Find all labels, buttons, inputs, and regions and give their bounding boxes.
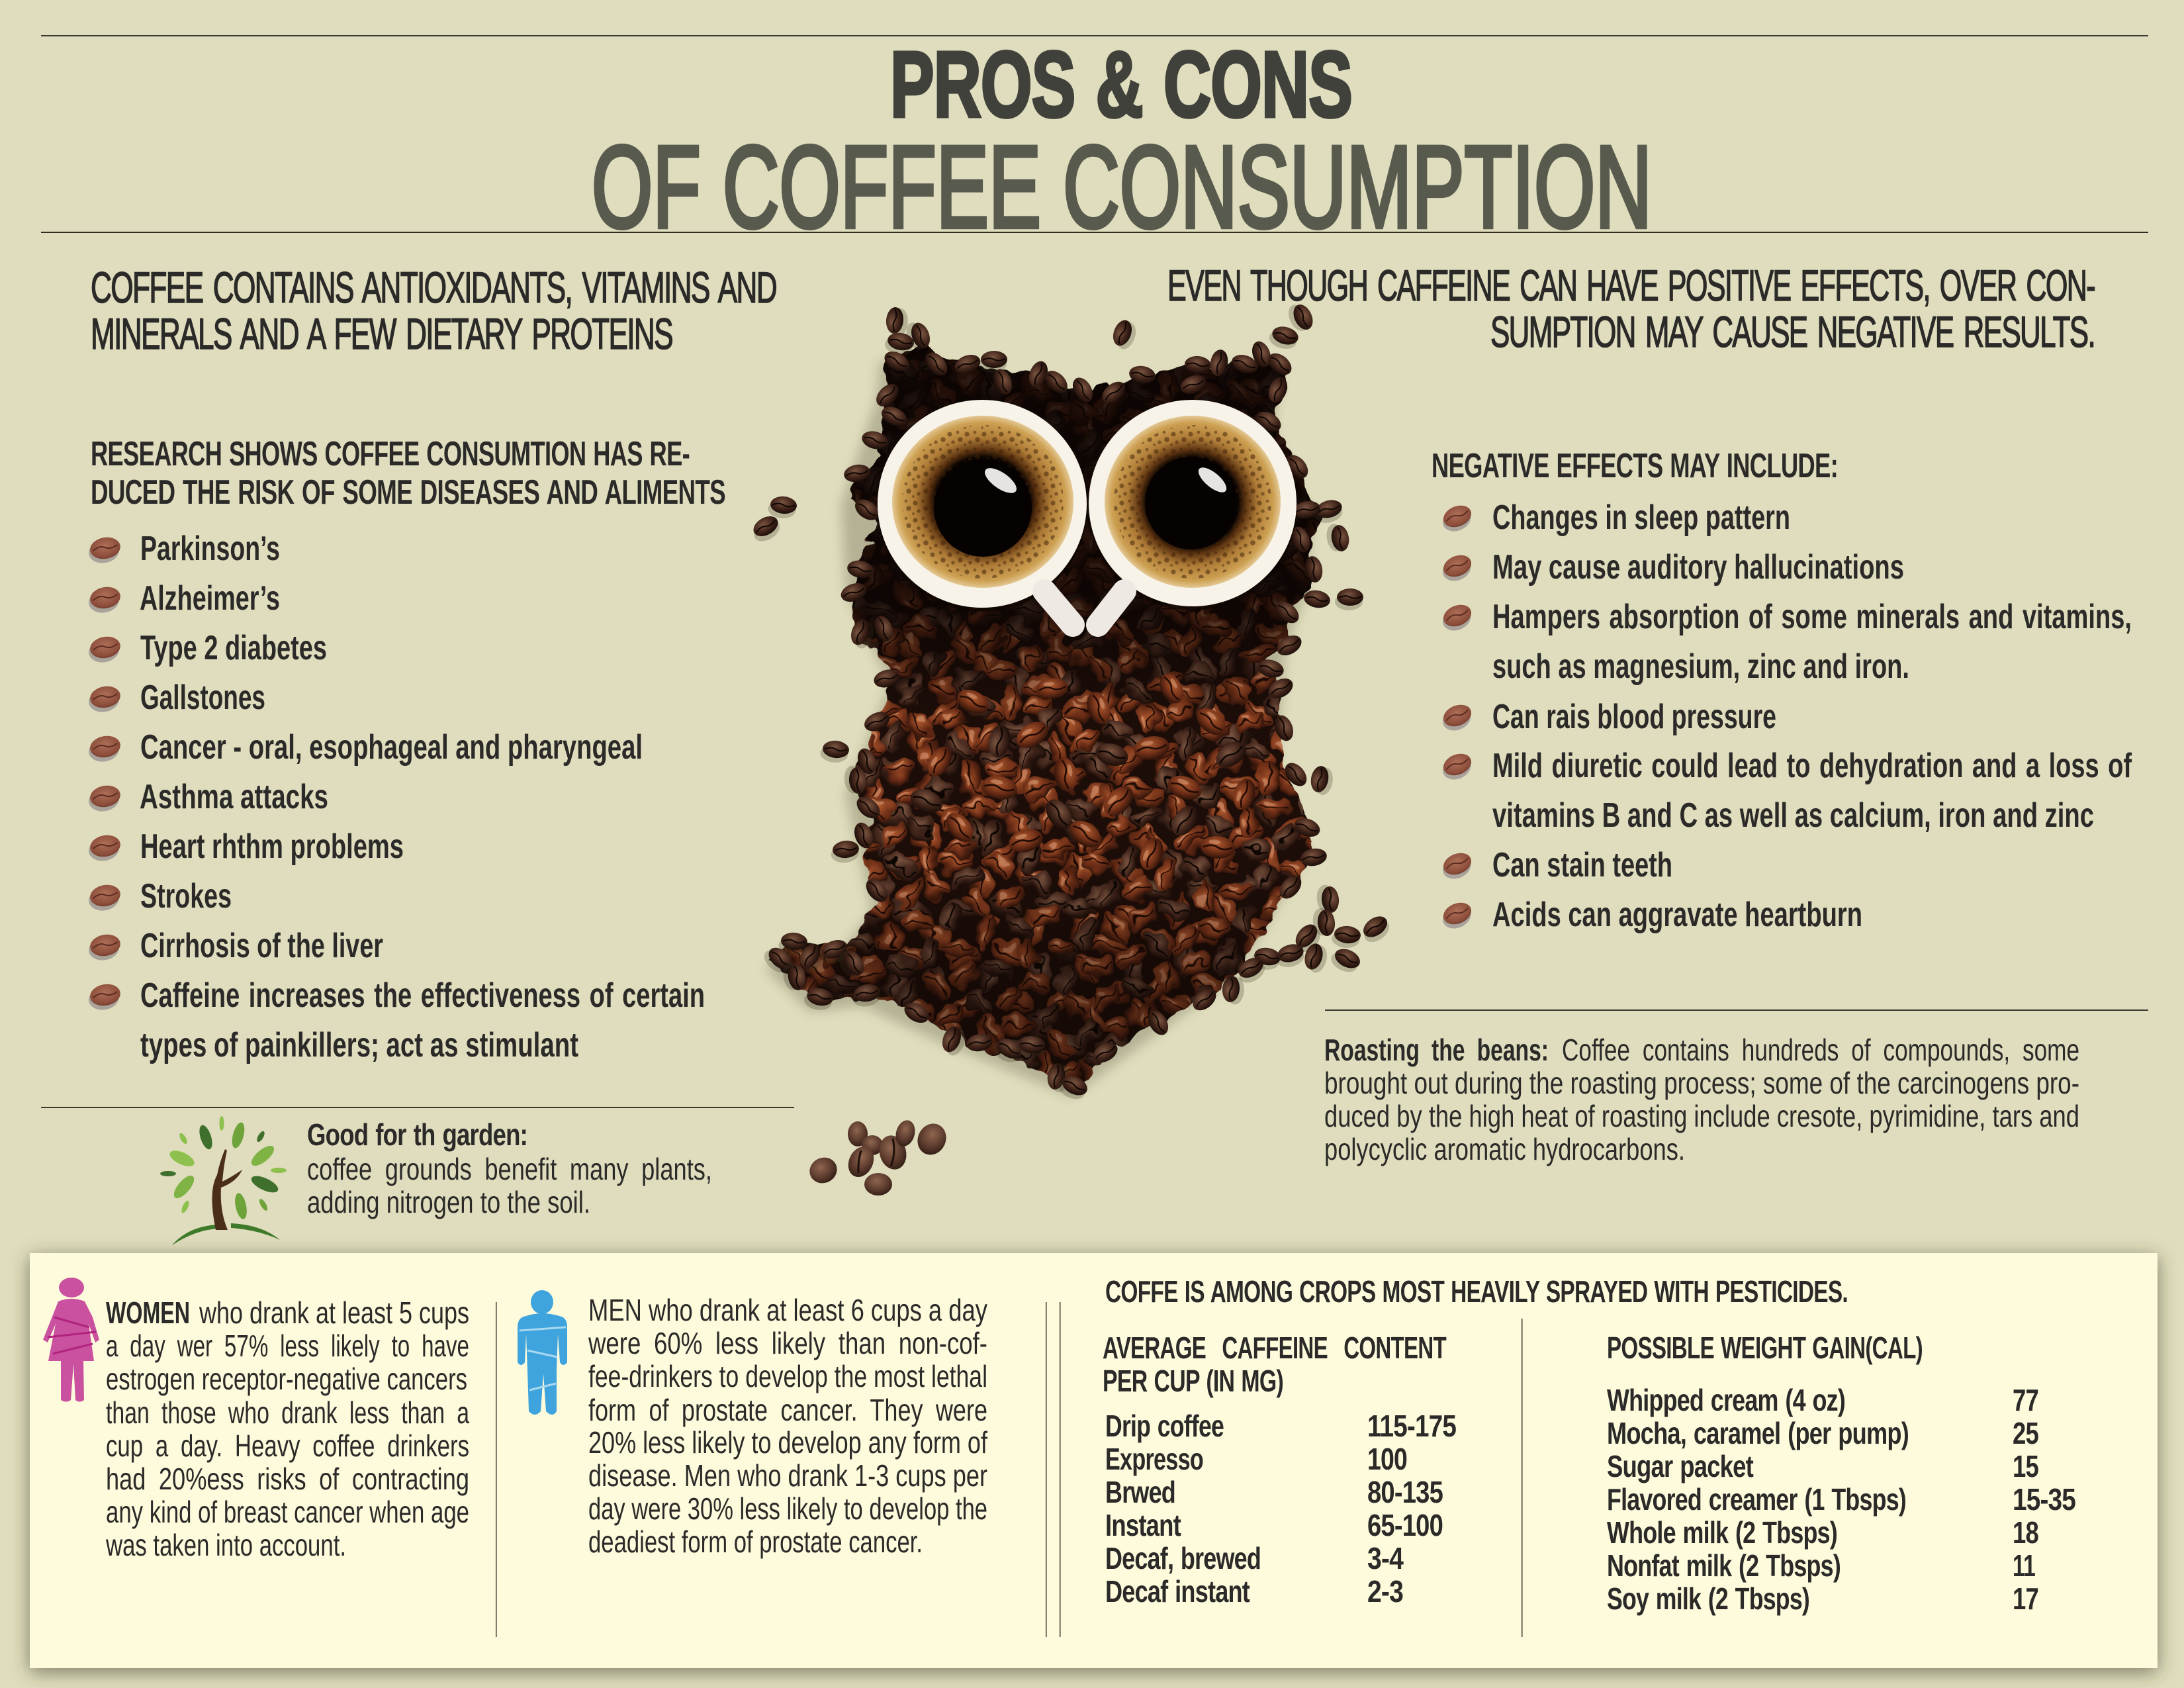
row: whole milk: Whole milk (2 Tbsps) [1607,1515,1837,1550]
row: sugar [1607,1449,2038,1483]
list item: Strokes [87,877,232,915]
list item: Type 2 diabetes: Type 2 diabetes [140,629,327,667]
row: whipped cream: Whipped cream (4 oz) [1607,1383,1845,1417]
row: flavored creamer: 15-35 [2013,1482,2075,1517]
list: diseases reduced [87,530,705,1064]
roasting the beans text: polycyclic aromatic hydrocarbons. [1324,1132,1685,1166]
garden section rule [41,1107,794,1108]
left intro heading: MINERALS AND A FEW DIETARY PROTEINS [91,309,672,358]
row: soy milk: 17 [2013,1581,2038,1616]
row: instant [1105,1508,1443,1542]
list item: Asthma attacks [87,778,328,816]
research subheading: DUCED THE RISK OF SOME DISEASES AND ALIMENTS [91,473,725,512]
row: expresso [1105,1442,1407,1476]
women text: estrogen receptor-negative cancers [106,1362,467,1396]
title bottom rule [41,232,2148,233]
table heading: POSSIBLE WEIGHT GAIN(CAL) [1607,1331,1923,1365]
row: decaf instant [1105,1574,1403,1609]
row: flavored creamer: Flavored creamer (1 Tbsps) [1607,1482,1906,1517]
roasting the beans text: Roasting the beans: [1324,1033,1549,1067]
garden text [307,1117,712,1219]
men text: day were 30% less likely to develop the [588,1491,987,1526]
list item: Cancer [87,728,643,767]
left eye: coffee cup [878,400,1087,612]
row: brwed: Brwed [1105,1475,1175,1509]
row: decaf brewed: 3-4 [1367,1541,1404,1575]
men text: deadiest form of prostate cancer. [588,1524,923,1559]
list item: hallucinations: May cause auditory hallucinations [1492,548,1904,586]
men text: form of prostate cancer. They were [588,1393,987,1427]
table: caffeine content [1103,1331,1456,1609]
women text: any kind of breast cancer when age [106,1495,469,1529]
men text: disease. Men who drank 1-3 cups per [588,1458,987,1493]
list item: teeth [1438,846,1672,884]
row: drip coffee: Drip coffee [1105,1409,1224,1443]
row: decaf brewed [1105,1541,1404,1575]
list item: hallucinations [1438,548,1904,586]
list item: Strokes: Strokes [140,877,232,915]
list item: blood pressure [1438,698,1776,736]
row: expresso: Expresso [1105,1442,1203,1476]
list item: Heart rhthm problems: Heart rhthm problems [140,827,404,866]
right intro heading [1167,261,2095,356]
roasting section rule [1325,1009,2148,1011]
list item: Alzheimer's [87,579,280,618]
list item: sleep [1438,498,1790,537]
list item: Type 2 diabetes [87,629,327,667]
row: sugar: 15 [2013,1449,2038,1483]
row: brwed [1105,1475,1443,1509]
row: whole milk [1607,1515,2038,1550]
row: decaf instant: 2-3 [1367,1574,1403,1609]
women text: had 20%ess risks of contracting [106,1462,469,1496]
title [592,32,1652,252]
icon: man [518,1290,567,1415]
list item: Asthma attacks: Asthma attacks [140,778,328,816]
list item: Cancer: Cancer - oral, esophageal and pharyngeal [140,728,643,767]
men text [588,1293,987,1559]
row: instant: 65-100 [1367,1508,1443,1542]
list item: Alzheimer's: Alzheimer’s [140,579,280,618]
list item: sleep: Changes in sleep pattern [1492,498,1790,537]
list item: Cirrhosis of the liver: Cirrhosis of the liver [140,927,383,965]
women text: cup a day. Heavy coffee drinkers [106,1429,469,1463]
row: soy milk [1607,1581,2038,1616]
row: nonfat milk [1607,1548,2035,1583]
negative effects heading: NEGATIVE EFFECTS MAY INCLUDE: [1432,447,1838,485]
loose and edge beans [749,300,1394,1103]
owl body bean texture [761,305,1330,1099]
row: drip coffee: 115-175 [1367,1409,1456,1443]
list item: Caffeine painkillers: Caffeine increases the effectiveness of certain [140,976,705,1015]
beak: cup handles [1044,591,1124,625]
row: soy milk: Soy milk (2 Tbsps) [1607,1581,1809,1616]
men text: 20% less likely to develop any form of [588,1425,987,1460]
row: instant: Instant [1105,1508,1181,1542]
row: drip coffee [1105,1409,1456,1443]
owl drop shadow [766,360,1311,1096]
garden text: coffee grounds benefit many plants, [307,1152,712,1186]
men text: were 60% less likely than non-cof- [588,1326,987,1360]
title line 2: OF COFFEE CONSUMPTION [592,122,1652,252]
row: mocha: Mocha, caramel (per pump) [1607,1416,1909,1450]
row: decaf instant: Decaf instant [1105,1574,1250,1609]
row: decaf brewed: Decaf, brewed [1105,1541,1261,1575]
list item: blood pressure: Can rais blood pressure [1492,698,1776,736]
list item: Cirrhosis of the liver [87,927,383,965]
top rule [41,35,2148,36]
left intro heading [91,263,776,358]
women text: was taken into account. [105,1528,346,1562]
left intro heading: COFFEE CONTAINS ANTIOXIDANTS, VITAMINS AND [91,263,776,312]
row: sugar: Sugar packet [1607,1449,1754,1483]
list item: teeth: Can stain teeth [1492,846,1672,884]
dividers [1046,1302,1522,1637]
women text: a day wer 57% less likely to have [106,1329,469,1363]
garden text: Good for th garden: [307,1117,527,1152]
list item: Heart rhthm problems [87,827,404,866]
panel background [30,1253,2158,1668]
list: negative effects [1438,498,2132,934]
list item: Gallstones [87,679,265,717]
women text [105,1295,469,1562]
panel: statistics [30,1253,2158,1668]
row: expresso: 100 [1367,1442,1407,1476]
list item: Caffeine painkillers [87,976,705,1064]
list item: Caffeine painkillers: types of painkillers; act as stimulant [140,1026,578,1064]
research subheading: RESEARCH SHOWS COFFEE CONSUMTION HAS RE- [91,435,690,473]
roasting the beans text [1324,1033,2079,1166]
list item: heartburn [1438,896,1862,934]
row: whipped cream: 77 [2013,1383,2038,1417]
row: mocha: 25 [2013,1416,2038,1450]
table heading [1103,1331,1447,1398]
row: nonfat milk: 11 [2013,1548,2035,1583]
row: whole milk: 18 [2013,1515,2038,1550]
women text: than those who drank less than a [106,1395,469,1430]
women text: who drank at least 5 cups [199,1295,469,1330]
list item: absorption: such as magnesium, zinc and iron. [1492,647,1909,686]
list item: heartburn: Acids can aggravate heartburn [1492,896,1862,934]
men text: fee-drinkers to develop the most lethal [588,1359,987,1393]
table: possible weight gain [1607,1331,2075,1616]
list item: diuretic [1438,747,2132,835]
table heading: PER CUP (IN MG) [1103,1364,1283,1398]
list item: absorption [1438,598,2132,686]
women text: WOMEN [106,1295,190,1330]
men text: MEN who drank at least 6 cups a day [588,1293,987,1327]
table heading: AVERAGE CAFFEINE CONTENT [1103,1331,1447,1365]
right eye: coffee cup [1089,400,1297,610]
owl made of coffee beans [749,300,1394,1103]
icon: woman [43,1278,99,1402]
research subheading [91,435,725,512]
row: brwed: 80-135 [1367,1475,1443,1509]
list item: Gallstones: Gallstones [140,679,265,717]
icon: small coffee beans cluster [805,1118,951,1196]
chest scatter beans [907,669,1258,873]
garden text: adding nitrogen to the soil. [307,1185,590,1219]
pesticide heading: COFFE IS AMONG CROPS MOST HEAVILY SPRAYED WITH PESTICIDES. [1105,1274,1848,1309]
row: nonfat milk: Nonfat milk (2 Tbsps) [1607,1548,1841,1583]
list item: Parkinson's [87,530,280,568]
title line 1: PROS & CONS [890,32,1352,136]
icon: tree [160,1116,287,1245]
list item: Parkinson's: Parkinson’s [140,530,280,568]
